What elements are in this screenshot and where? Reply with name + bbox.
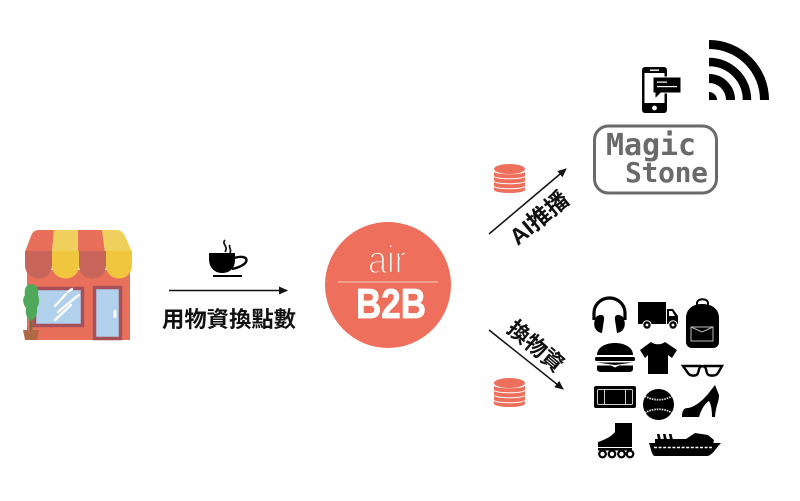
icon: glasses	[683, 366, 722, 376]
air B2B logo	[325, 222, 451, 348]
air B2B logo: air	[368, 239, 406, 282]
air B2B logo: B2B	[356, 280, 426, 327]
Magic Stone logo: Magic	[606, 128, 696, 163]
icon: coins top	[494, 164, 525, 193]
label: use goods to exchange points: 用物資換點數	[162, 307, 296, 332]
Magic Stone logo: Stone	[625, 156, 708, 189]
icon: coins bottom	[494, 378, 525, 407]
icon: t-shirt	[640, 342, 677, 374]
icon: smartphone with message	[642, 67, 681, 113]
icon: delivery truck	[638, 302, 678, 329]
arrow: to Magic Stone	[489, 169, 566, 234]
icon: headphones	[594, 298, 625, 333]
icon: coffee cup	[209, 240, 246, 277]
icon: baseball	[643, 389, 674, 420]
label: exchange goods: 換物資	[502, 316, 569, 377]
arrow: to goods	[489, 330, 563, 389]
icon: burger	[595, 343, 635, 372]
icon: wifi signal	[709, 44, 764, 100]
label: AI push: AI推播	[504, 186, 574, 250]
icon: cruise ship	[649, 433, 721, 456]
icon: ticket	[594, 386, 636, 408]
icon: high heel	[682, 385, 719, 417]
icon: backpack	[686, 299, 719, 348]
icon: storefront	[23, 230, 132, 340]
icon: roller skate	[598, 423, 633, 457]
arrow: store to air B2B	[169, 290, 287, 292]
Magic Stone logo	[594, 126, 716, 193]
